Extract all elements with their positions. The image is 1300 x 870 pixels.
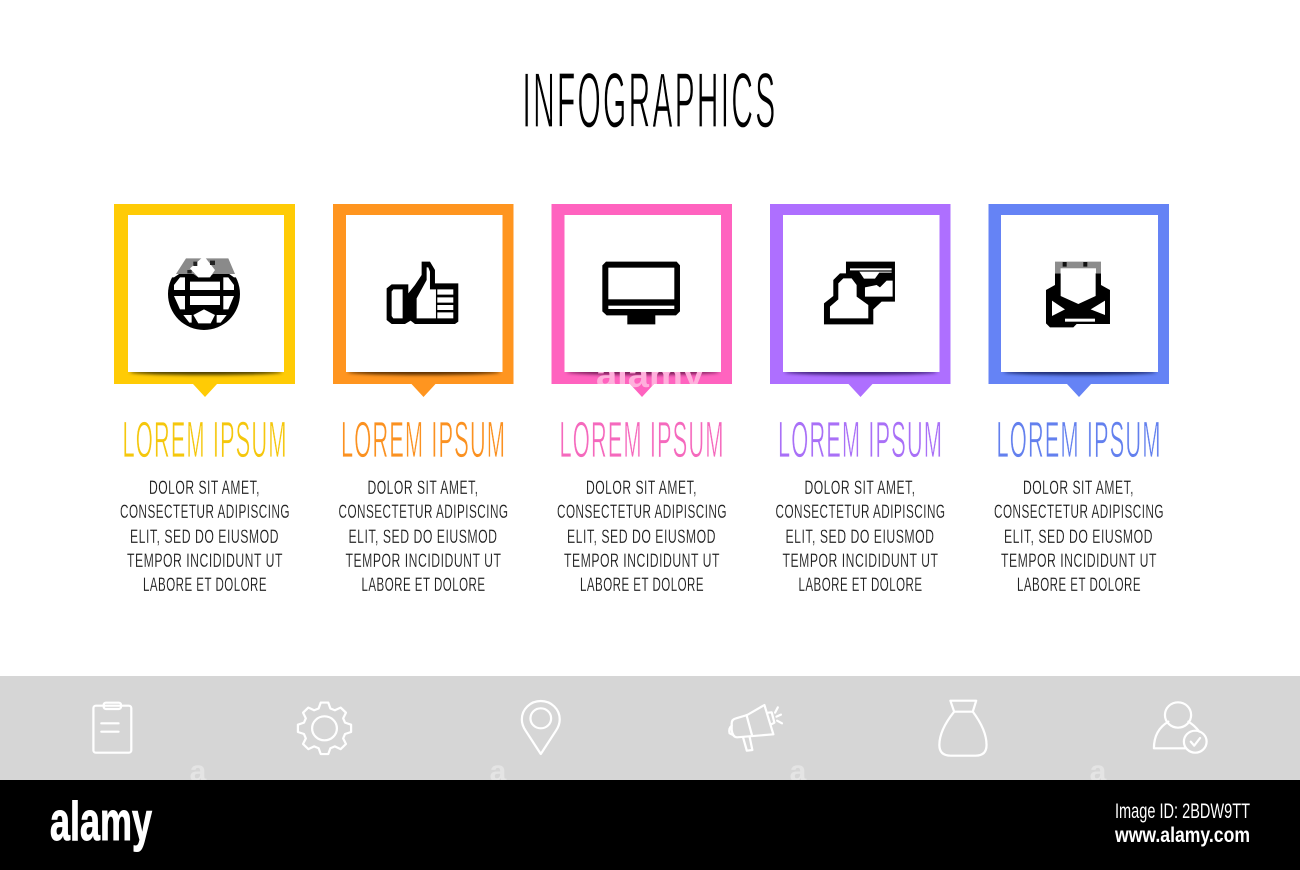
text block: yellow <box>120 477 290 596</box>
text block: yellow: LABORE ET DOLORE <box>143 574 267 596</box>
icon: open envelope <box>1046 262 1110 327</box>
text block: pink: ELIT, SED DO EIUSMOD <box>567 526 716 548</box>
panel: orange card <box>333 204 514 397</box>
text block: orange: CONSECTETUR ADIPISCING <box>338 501 508 523</box>
text block: blue: LABORE ET DOLORE <box>1017 574 1141 596</box>
text: INFOGRAPHICS <box>522 56 778 144</box>
text block: orange: TEMPOR INCIDIDUNT UT <box>346 550 502 572</box>
icon: megaphone <box>729 705 782 751</box>
icon: thumbs up <box>387 262 458 324</box>
icon: user with check <box>1154 702 1207 753</box>
text block: pink: LABORE ET DOLORE <box>580 574 704 596</box>
text block: blue: ELIT, SED DO EIUSMOD <box>1004 526 1153 548</box>
panel: grey icon band <box>0 676 1300 788</box>
text block: yellow: CONSECTETUR ADIPISCING <box>120 501 290 523</box>
text block: blue: TEMPOR INCIDIDUNT UT <box>1001 550 1157 572</box>
panel: grey icon band: a <box>1090 755 1107 788</box>
icon: monitor <box>602 262 680 324</box>
icon: map pin <box>522 701 560 754</box>
text block: orange: ELIT, SED DO EIUSMOD <box>348 526 498 548</box>
logo: alamy: alamy <box>50 790 152 852</box>
panel: yellow card <box>114 204 295 397</box>
panel: pink card <box>552 204 732 397</box>
text block: blue: CONSECTETUR ADIPISCING <box>994 501 1164 523</box>
text block: orange: DOLOR SIT AMET, <box>368 477 478 499</box>
text block: purple: CONSECTETUR ADIPISCING <box>776 501 946 523</box>
text block: purple: TEMPOR INCIDIDUNT UT <box>782 550 938 572</box>
text block: yellow: ELIT, SED DO EIUSMOD <box>130 526 279 548</box>
panel: blue card <box>988 204 1169 397</box>
text block: blue: DOLOR SIT AMET, <box>1023 477 1134 499</box>
icon: clipboard <box>93 703 131 753</box>
panel: black footer <box>0 780 1300 870</box>
text block: pink: DOLOR SIT AMET, <box>586 477 697 499</box>
icon: person with card <box>824 262 895 324</box>
panel: grey icon band: a <box>490 755 507 788</box>
text: LOREM IPSUM <box>778 411 943 468</box>
panel: purple card <box>770 204 950 397</box>
icon: gear <box>298 703 351 754</box>
panel: grey icon band: a <box>190 755 207 788</box>
text: LOREM IPSUM <box>341 411 506 468</box>
text block: pink <box>557 477 727 596</box>
text: LOREM IPSUM <box>560 411 724 468</box>
icon: globe <box>165 253 243 330</box>
text: website: www.alamy.com <box>1114 824 1250 847</box>
icon: sack <box>939 701 987 756</box>
text block: orange <box>338 477 508 596</box>
text block: pink: TEMPOR INCIDIDUNT UT <box>564 550 720 572</box>
text block: yellow: TEMPOR INCIDIDUNT UT <box>127 550 283 572</box>
text block: purple: LABORE ET DOLORE <box>798 574 922 596</box>
text block: purple: DOLOR SIT AMET, <box>804 477 916 499</box>
text block: blue <box>994 477 1164 596</box>
panel: grey icon band: a <box>790 755 807 788</box>
text: LOREM IPSUM <box>122 411 288 468</box>
text block: purple: ELIT, SED DO EIUSMOD <box>786 526 934 548</box>
text block: orange: LABORE ET DOLORE <box>362 574 486 596</box>
watermark: alamy on pink: alamy <box>596 354 704 395</box>
text block: pink: CONSECTETUR ADIPISCING <box>557 501 727 523</box>
text block: yellow: DOLOR SIT AMET, <box>149 477 260 499</box>
text block: purple <box>776 477 946 596</box>
